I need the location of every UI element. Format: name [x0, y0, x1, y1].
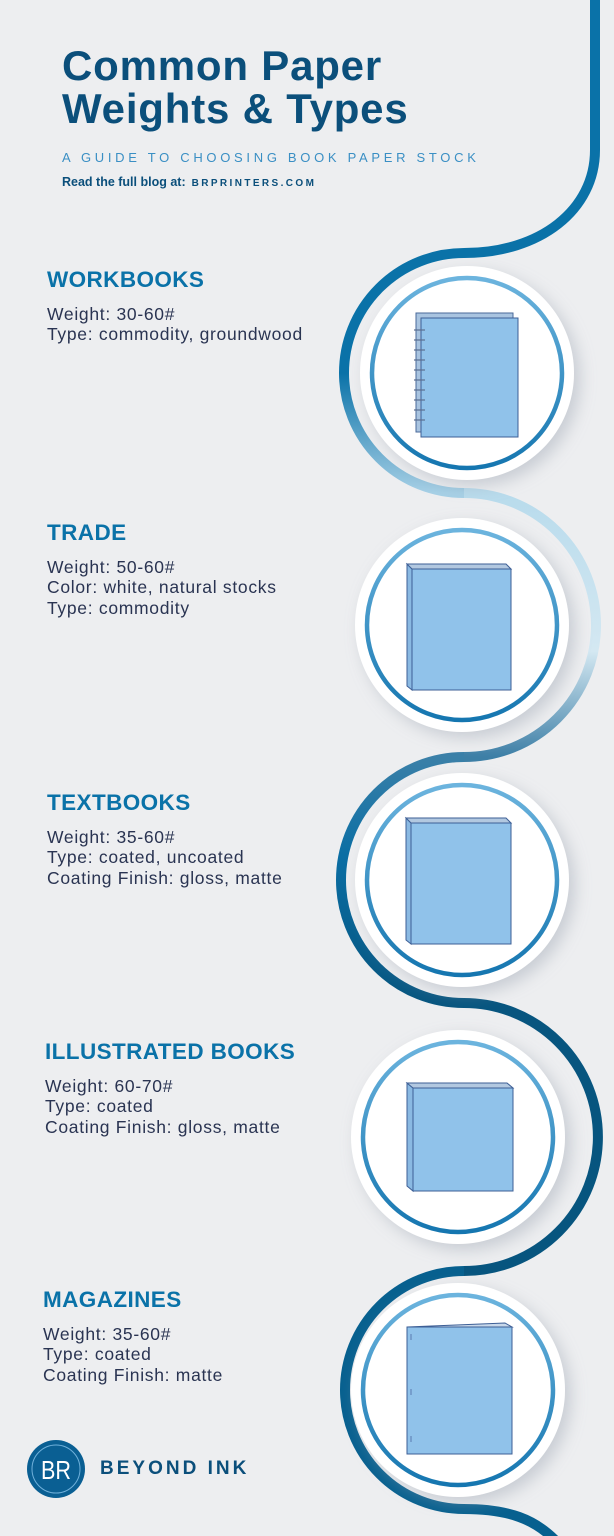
snake path: [341, 0, 598, 1536]
section: trade: [47, 520, 277, 618]
section: trade: TRADE: [47, 520, 126, 545]
title: Weights & Types: [62, 85, 409, 132]
section: textbooks: TEXTBOOKS: [47, 790, 191, 815]
subtitle: A GUIDE TO CHOOSING BOOK PAPER STOCK: [62, 150, 480, 165]
section: trade: Type: commodity: [47, 598, 190, 618]
section: workbooks: WORKBOOKS: [47, 267, 204, 292]
section: illustrated books: Coating Finish: gloss, matte: [45, 1116, 281, 1136]
section: trade: Color: white, natural stocks: [47, 577, 277, 597]
section: magazines: Weight: 35-60#: [43, 1324, 171, 1344]
section: magazines: MAGAZINES: [43, 1287, 182, 1312]
section: textbooks: Type: coated, uncoated: [47, 847, 244, 867]
section: textbooks: Weight: 35-60#: [47, 826, 175, 846]
logo icon: [27, 1440, 85, 1498]
section: textbooks: [47, 790, 283, 888]
section: illustrated books: Weight: 60-70#: [45, 1076, 173, 1096]
logo text: BEYOND INK: [100, 1458, 249, 1479]
section: magazines: [43, 1287, 223, 1384]
section: magazines: Coating Finish: matte: [43, 1364, 223, 1384]
logo icon: BR: [41, 1455, 71, 1485]
section: workbooks: Weight: 30-60#: [47, 304, 175, 324]
title: [62, 42, 409, 132]
circle: workbooks: [360, 266, 574, 480]
section: textbooks: Coating Finish: gloss, matte: [47, 868, 283, 888]
title: Common Paper: [62, 42, 382, 89]
circle: magazines: [351, 1283, 565, 1497]
circle: illustrated: [351, 1030, 565, 1244]
section: illustrated books: [45, 1039, 295, 1136]
section: illustrated books: ILLUSTRATED BOOKS: [45, 1039, 295, 1064]
section: illustrated books: Type: coated: [45, 1096, 154, 1116]
section: workbooks: Type: commodity, groundwood: [47, 324, 303, 344]
circle: textbooks: [355, 773, 569, 987]
blog link: Read the full blog at: BRPRINTERS.COM: [62, 175, 316, 189]
section: workbooks: [47, 267, 303, 344]
section: trade: Weight: 50-60#: [47, 556, 175, 576]
section: magazines: Type: coated: [43, 1344, 152, 1364]
circle: trade: [355, 518, 569, 732]
